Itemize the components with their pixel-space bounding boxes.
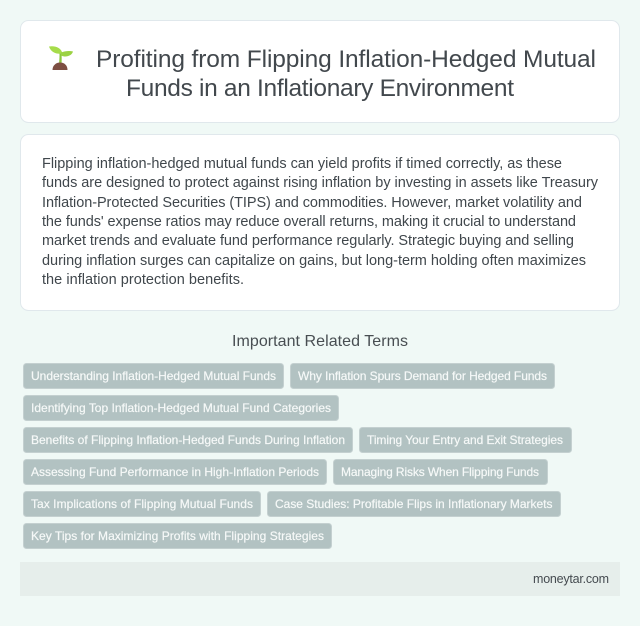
text block: summary: Flipping inflation-hedged mutual funds can yield profits if timed correctly, as these [42, 156, 562, 172]
tag: Why Inflation Spurs Demand for Hedged Funds [298, 369, 547, 383]
icon: seedling [49, 46, 73, 70]
tag [24, 524, 332, 548]
tag: Understanding Inflation-Hedged Mutual Funds [31, 369, 276, 383]
footer source text: moneytar.com [533, 572, 609, 586]
tag: Case Studies: Profitable Flips in Inflationary Markets [275, 497, 552, 511]
text block: summary: the funds' expense ratios may reduce overall returns, making it crucial to understand [42, 214, 576, 230]
tag: Key Tips for Maximizing Profits with Flipping Strategies [31, 529, 324, 543]
tag: Assessing Fund Performance in High-Inflation Periods [31, 465, 319, 479]
title: Funds in an Inflationary Environment [126, 75, 514, 102]
title [96, 46, 596, 102]
tag [334, 460, 548, 484]
tag: Managing Risks When Flipping Funds [341, 465, 539, 479]
tag [24, 396, 338, 420]
tag: Benefits of Flipping Inflation-Hedged Funds During Inflation [31, 433, 345, 447]
tag [290, 364, 554, 388]
heading: related terms: Important Related Terms [232, 333, 408, 350]
tag [268, 492, 560, 516]
tag: Tax Implications of Flipping Mutual Funds [31, 497, 253, 511]
text block: summary: during inflation surges can capitalize on gains, but long-term holding often maximizes [42, 253, 586, 269]
panel: title card [20, 20, 620, 122]
tag [24, 428, 352, 452]
tag [24, 460, 326, 484]
tag: Timing Your Entry and Exit Strategies [367, 433, 563, 447]
footer bar [20, 562, 620, 596]
text block: summary: Inflation-Protected Securities (TIPS) and commodities. However, market volatility and [42, 195, 582, 211]
tag [24, 492, 260, 516]
tag [360, 428, 572, 452]
text block: summary: market trends and evaluate fund performance regularly. Strategic buying and selling [42, 233, 574, 249]
title: Profiting from Flipping Inflation-Hedged Mutual [96, 46, 596, 73]
tag: Identifying Top Inflation-Hedged Mutual Fund Categories [31, 401, 331, 415]
panel: summary text card [20, 134, 620, 310]
tag list [24, 364, 572, 548]
tag [24, 364, 284, 388]
text block: summary: the inflation protection benefits. [42, 272, 244, 288]
text block: summary: funds are designed to protect against rising inflation by investing in assets like Treasury [42, 175, 599, 191]
text block: summary [42, 156, 599, 288]
